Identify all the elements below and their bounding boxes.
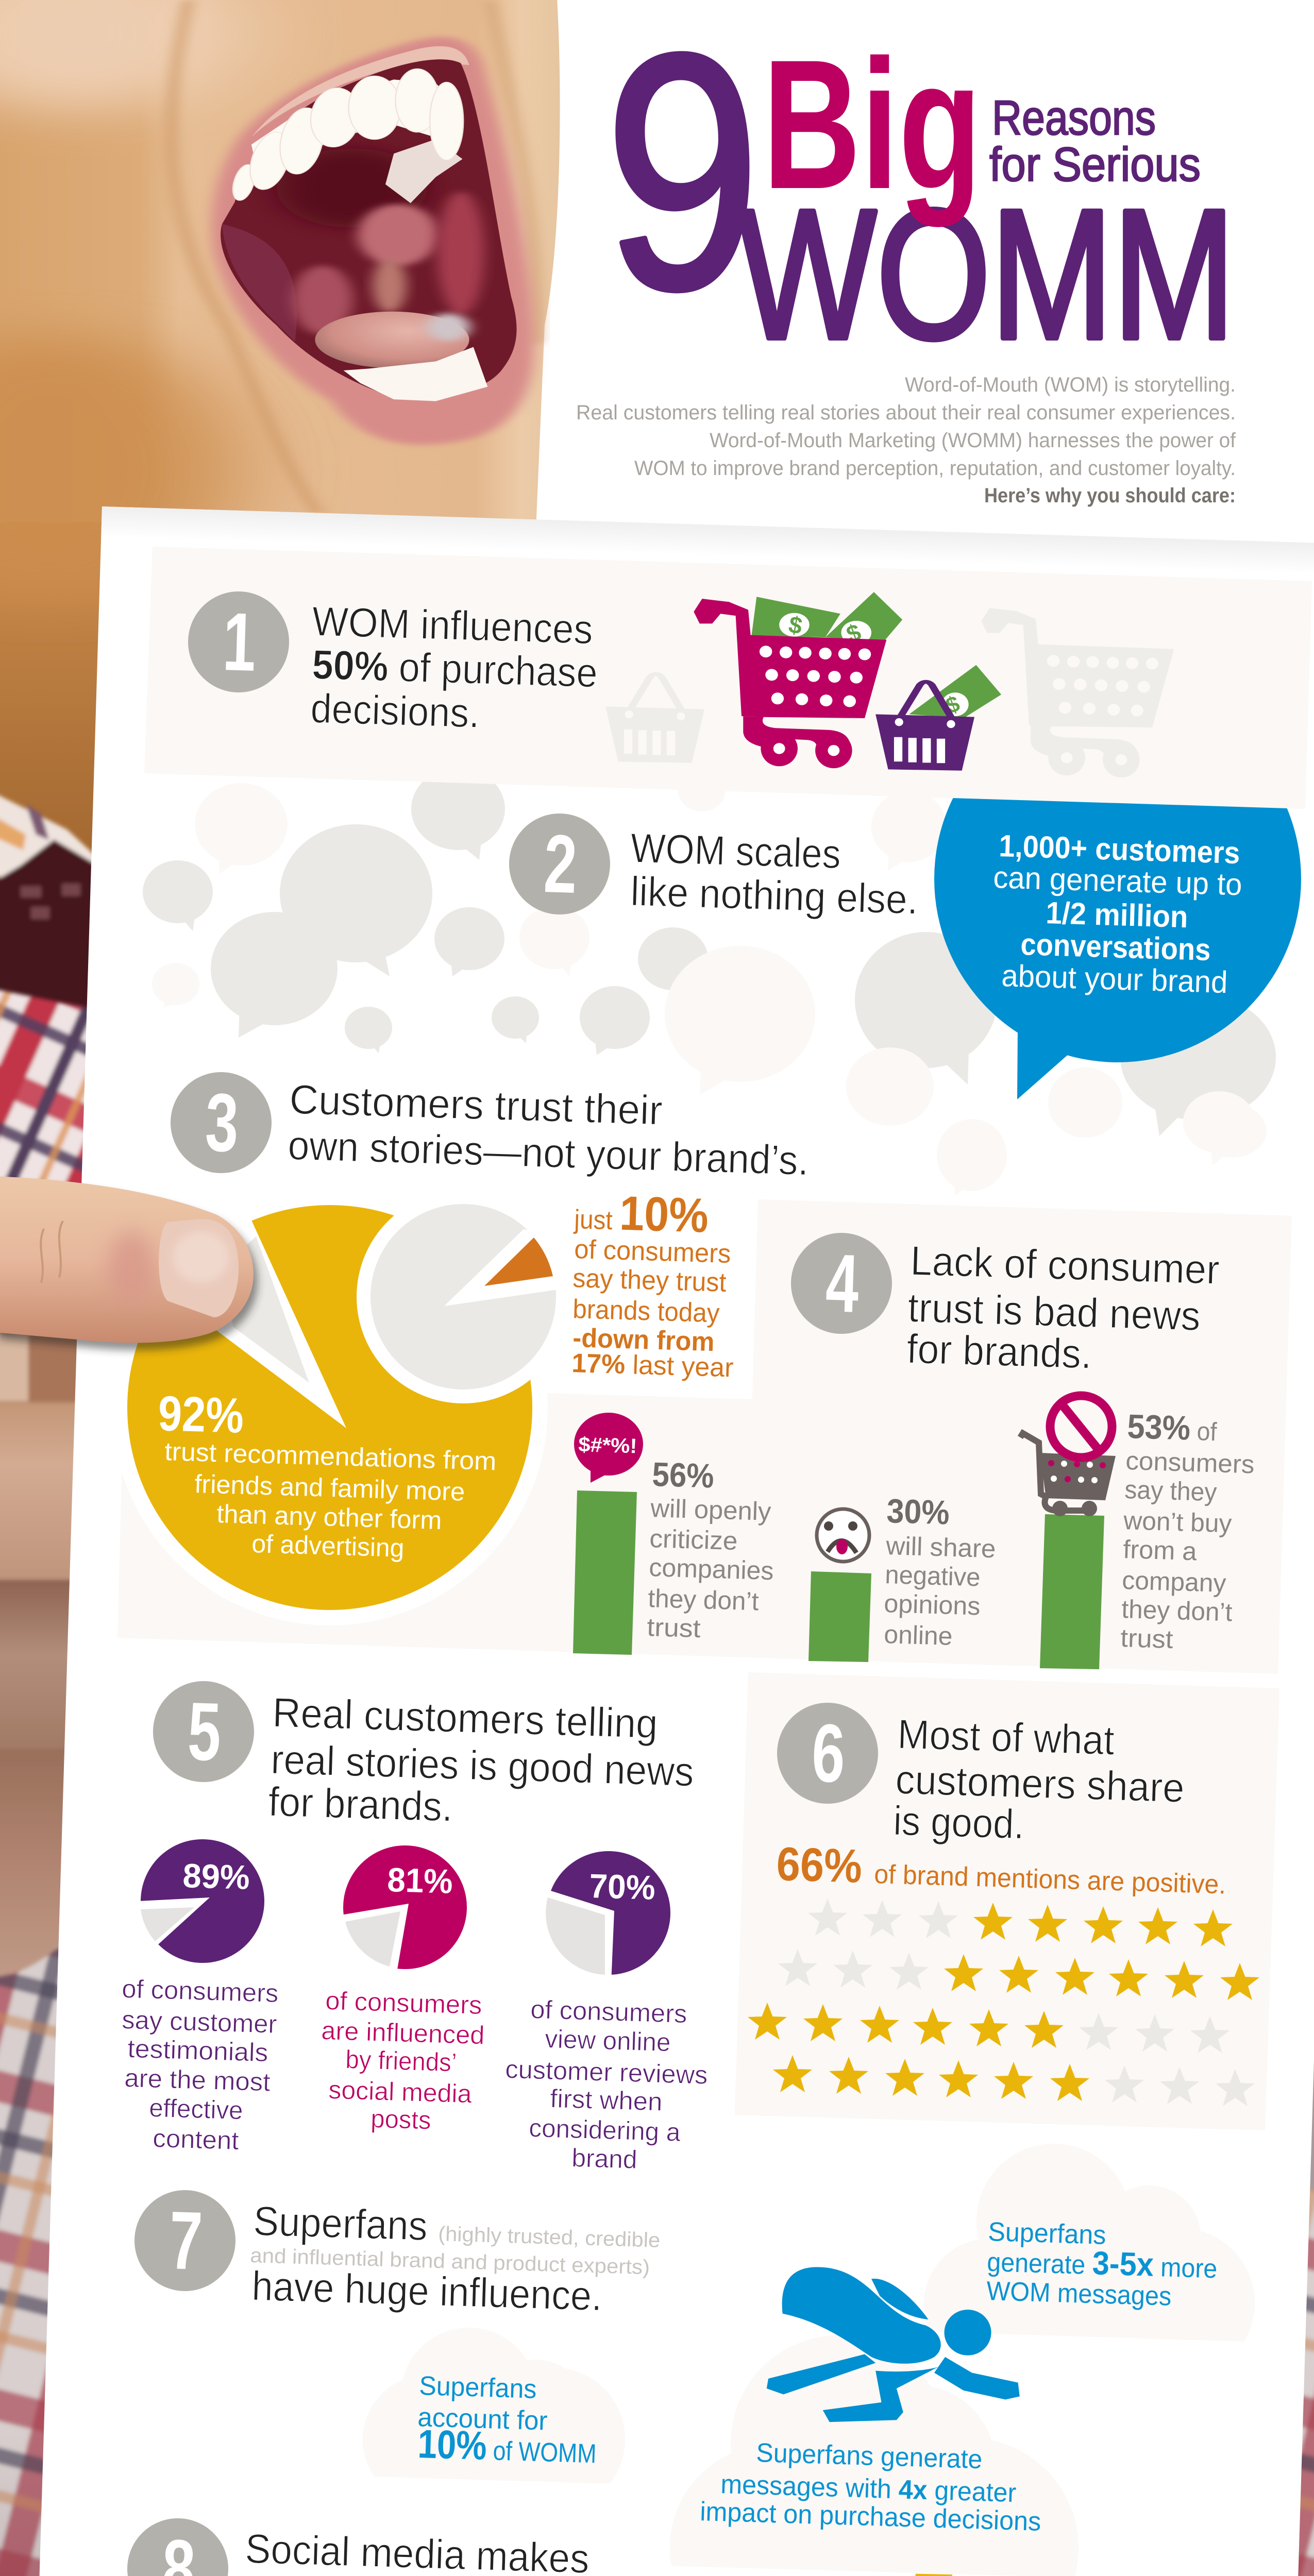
pie chart: 10 percent — [370, 1204, 567, 1389]
photo: neck and shirt collar — [0, 489, 134, 1010]
number 5: 5 — [187, 1685, 222, 1778]
number 6 — [777, 1703, 878, 1804]
stat text: 53 percent: consumers — [1125, 1446, 1255, 1479]
icon: faded basket — [605, 674, 704, 763]
stat text: 53 percent: company — [1122, 1566, 1226, 1598]
stat text: 56 percent: criticize — [649, 1524, 738, 1555]
stat text: 30 percent: 30% — [886, 1492, 950, 1532]
heading 7: Superfans — [252, 2198, 428, 2249]
text in yellow pie: of advertising — [251, 1529, 405, 1563]
number 1 — [188, 591, 289, 692]
reason 6 — [748, 1703, 1259, 2106]
pie chart: 89 percent — [124, 1839, 264, 1963]
stat: 66 percent: of brand mentions are positive. — [874, 1859, 1226, 1900]
number 6: 6 — [811, 1706, 846, 1800]
stat text: 30 percent: will share — [885, 1531, 996, 1563]
heading 1: WOM influences — [311, 598, 594, 652]
heading 2: like nothing else. — [630, 868, 919, 923]
stat text: 56 percent — [647, 1455, 774, 1643]
stat text: 53 percent: won’t buy — [1123, 1506, 1232, 1538]
reason 7 — [134, 2144, 1255, 2576]
caption: 81 percent: social media — [328, 2075, 472, 2108]
cloud text: 4x: messages with 4x greater — [720, 2469, 1017, 2508]
icon: figure with megaphone — [767, 2267, 1020, 2422]
heading 5: for brands. — [267, 1778, 453, 1830]
stat text: 30 percent — [884, 1492, 996, 1651]
icon: banknotes in cart — [752, 592, 1001, 719]
star rating rows — [748, 1899, 1259, 2106]
callout text in blue bubble — [993, 828, 1242, 999]
stat text: 56 percent: will openly — [650, 1494, 771, 1526]
pie chart: 89 percent: 89% — [182, 1856, 250, 1896]
cloud text: 3-5x: generate 3-5x more — [987, 2241, 1218, 2285]
reason 5 — [122, 1681, 708, 2174]
cloud text: 3-5x: WOM messages — [986, 2276, 1172, 2312]
icon: magenta cart — [694, 599, 886, 768]
caption: 81 percent: by friends’ — [345, 2045, 457, 2077]
intro text block: Word-of-Mouth (WOM) is storytelling. — [905, 374, 1236, 396]
panel: items 3-4 background — [117, 1199, 1292, 1674]
stat text: 30 percent: opinions — [884, 1589, 981, 1621]
reason 4 — [573, 1233, 1255, 1669]
text in yellow pie: 92% — [157, 1386, 245, 1444]
caption: 81 percent — [321, 1986, 485, 2135]
cloud: 4x — [670, 2335, 1079, 2576]
intro text block: Real customers telling real stories about their real consumer experiences. — [576, 401, 1236, 424]
text: just 10 percent: 17% last year — [571, 1348, 734, 1383]
caption: 89 percent: effective — [149, 2093, 243, 2125]
text in yellow pie: friends and family more — [194, 1469, 465, 1506]
pie chart: 92 percent — [112, 1190, 570, 1625]
panel: item 1 background — [144, 547, 1312, 809]
cloud: 10 percent — [363, 2328, 625, 2483]
heading 2: WOM scales — [630, 825, 841, 877]
text: just 10 percent: of consumers — [574, 1234, 731, 1269]
heading 4 — [906, 1238, 1220, 1377]
cloud text: 4x: Superfans generate — [756, 2438, 983, 2475]
heading 5 — [267, 1689, 695, 1830]
cloud text: 10 percent: account for — [417, 2402, 548, 2436]
heading 3: Customers trust their — [289, 1076, 663, 1133]
icon: banknotes in cart: $ — [787, 611, 804, 639]
pie chart: 70 percent — [536, 1851, 670, 1984]
callout text in blue bubble: conversations — [1020, 927, 1211, 967]
callout text in blue bubble: 1/2 million — [1046, 895, 1188, 934]
icon: swearing speech bubble: $#*%! — [578, 1433, 637, 1458]
callout text in blue bubble: can generate up to — [993, 860, 1242, 902]
title — [604, 0, 1235, 377]
reason 8 — [82, 2518, 653, 2576]
stat text: 30 percent: negative — [885, 1560, 981, 1592]
reason 1 — [188, 591, 1174, 777]
caption: 89 percent: content — [153, 2124, 239, 2155]
reason 3 — [112, 1072, 810, 1625]
text in yellow pie: than any other form — [216, 1499, 442, 1535]
text: just 10 percent — [571, 1184, 734, 1383]
caption: 70 percent: brand — [571, 2143, 637, 2174]
cloud text: 10 percent: 10% of WOMM — [417, 2421, 597, 2471]
panel: item 6 background — [735, 1672, 1279, 2130]
stat text: 30 percent: online — [884, 1620, 953, 1651]
heading 7: (highly trusted, credible — [438, 2223, 661, 2252]
number 7 — [134, 2190, 235, 2291]
number 1: 1 — [222, 595, 257, 688]
reason 2 — [509, 814, 1242, 999]
icon: unhappy face — [817, 1509, 869, 1562]
heading 1: decisions. — [310, 685, 480, 736]
number 4: 4 — [824, 1236, 860, 1330]
text in yellow pie: trust recommendations from — [164, 1437, 497, 1476]
heading 4: Lack of consumer — [909, 1238, 1220, 1293]
cloud: 3-5x — [924, 2144, 1255, 2341]
text: just 10 percent: brands today — [572, 1294, 720, 1329]
heading 6: customers share — [895, 1756, 1185, 1811]
stat: 66 percent: 66% — [776, 1838, 863, 1893]
finger holding the sheet — [0, 1176, 258, 1350]
heading 3: own stories—not your brand’s. — [287, 1122, 810, 1183]
sheet top shade — [101, 506, 1314, 576]
background: white area beside face — [531, 0, 1314, 577]
icon: faded cart — [981, 608, 1174, 777]
speech bubbles background, pale — [152, 770, 1267, 1195]
bar chart: 56, 30, 53 percent — [573, 1490, 1104, 1669]
stat text: 53 percent: trust — [1120, 1623, 1173, 1654]
number 7: 7 — [168, 2194, 204, 2287]
icon: banknotes in cart: $ — [843, 618, 864, 648]
number 8 — [127, 2518, 228, 2576]
icon: banknotes in cart: $ — [942, 691, 963, 719]
heading 1 — [310, 598, 598, 736]
heading 6: Most of what — [897, 1711, 1115, 1764]
icon: swearing speech bubble — [574, 1413, 643, 1483]
blue speech bubble — [934, 696, 1301, 1099]
caption: 89 percent: say customer — [122, 2005, 277, 2039]
callout text in blue bubble: about your brand — [1001, 958, 1228, 999]
title: Big — [763, 21, 982, 228]
text: just 10 percent: -down from — [572, 1323, 715, 1357]
cloud text: 10 percent: Superfans — [419, 2371, 537, 2404]
heading 2 — [630, 825, 919, 923]
caption: 70 percent: first when — [550, 2084, 663, 2116]
pie chart: 81 percent — [330, 1845, 467, 1984]
pie chart: 81 percent: 81% — [387, 1860, 453, 1901]
title: for Serious — [989, 138, 1201, 191]
stat text: 56 percent: they don’t — [648, 1584, 759, 1616]
cloud text: 3-5x — [986, 2217, 1218, 2312]
caption: 81 percent: of consumers — [325, 1986, 482, 2020]
stat text: 56 percent: 56% — [652, 1455, 715, 1495]
number 3: 3 — [204, 1076, 240, 1169]
heading 1: 50% of purchase — [311, 641, 598, 696]
heading 3 — [287, 1076, 810, 1183]
stat text: 53 percent: they don’t — [1121, 1595, 1233, 1626]
number 5 — [153, 1681, 254, 1782]
cloud text: 10 percent — [417, 2371, 597, 2471]
caption: 89 percent: testimonials — [127, 2034, 268, 2067]
number 3 — [171, 1072, 272, 1173]
title: Reasons — [992, 91, 1156, 145]
heading 4: trust is bad news — [907, 1284, 1201, 1339]
stat text: 53 percent — [1120, 1407, 1255, 1654]
heading 7: have huge influence. — [251, 2263, 603, 2319]
caption: 70 percent: of consumers — [530, 1995, 687, 2028]
stat text: 56 percent: companies — [649, 1553, 774, 1585]
caption: 81 percent: are influenced — [321, 2016, 485, 2050]
text: just 10 percent: just 10% — [573, 1184, 709, 1243]
text in yellow pie — [157, 1386, 497, 1563]
heading 5: real stories is good news — [270, 1736, 695, 1795]
caption: 89 percent: of consumers — [122, 1974, 279, 2008]
stat text: 53 percent: from a — [1123, 1535, 1197, 1566]
number 2 — [509, 814, 610, 914]
stat: 66 percent — [776, 1838, 1226, 1900]
stat text: 53 percent: 53% of — [1127, 1407, 1218, 1448]
heading 5: Real customers telling — [272, 1689, 659, 1747]
caption: 70 percent: considering a — [529, 2113, 681, 2147]
photo: open mouth and face — [0, 0, 560, 607]
number 4 — [791, 1233, 892, 1334]
sheet of paper — [16, 506, 1314, 2576]
icon: lightning bolt — [899, 2574, 958, 2576]
heading 6: is good. — [892, 1798, 1025, 1848]
cloud text: 4x — [700, 2438, 1041, 2537]
heading 7 — [250, 2198, 661, 2319]
text: just 10 percent: say they trust — [572, 1263, 727, 1298]
stat text: 53 percent: say they — [1124, 1475, 1217, 1506]
icon: crossed-out shopping cart — [1020, 1396, 1116, 1516]
caption: 89 percent — [122, 1974, 279, 2155]
intro text block: Word-of-Mouth Marketing (WOMM) harnesses the power of — [710, 429, 1236, 452]
caption: 89 percent: are the most — [124, 2063, 271, 2096]
caption: 81 percent: posts — [370, 2104, 431, 2135]
speech bubbles background — [143, 768, 1276, 1136]
intro text block: Here’s why you should care: — [984, 484, 1236, 507]
hand fingers at left — [0, 1332, 113, 1977]
cloud text: 3-5x: Superfans — [988, 2217, 1106, 2250]
caption: 70 percent: customer reviews — [505, 2055, 708, 2090]
heading 7: and influential brand and product experts) — [250, 2244, 650, 2279]
pie chart: 70 percent: 70% — [589, 1867, 656, 1907]
intro text block — [576, 374, 1236, 507]
heading 6 — [892, 1711, 1185, 1848]
caption: 70 percent — [505, 1995, 708, 2174]
number 2: 2 — [543, 817, 578, 910]
intro text block: WOM to improve brand perception, reputation, and customer loyalty. — [634, 457, 1236, 480]
heading 4: for brands. — [906, 1326, 1092, 1377]
callout text in blue bubble: 1,000+ customers — [999, 828, 1240, 870]
cloud text: 4x: impact on purchase decisions — [700, 2497, 1041, 2537]
stat text: 56 percent: trust — [647, 1613, 701, 1643]
caption: 70 percent: view online — [545, 2024, 671, 2057]
icon: purple basket — [875, 682, 974, 771]
